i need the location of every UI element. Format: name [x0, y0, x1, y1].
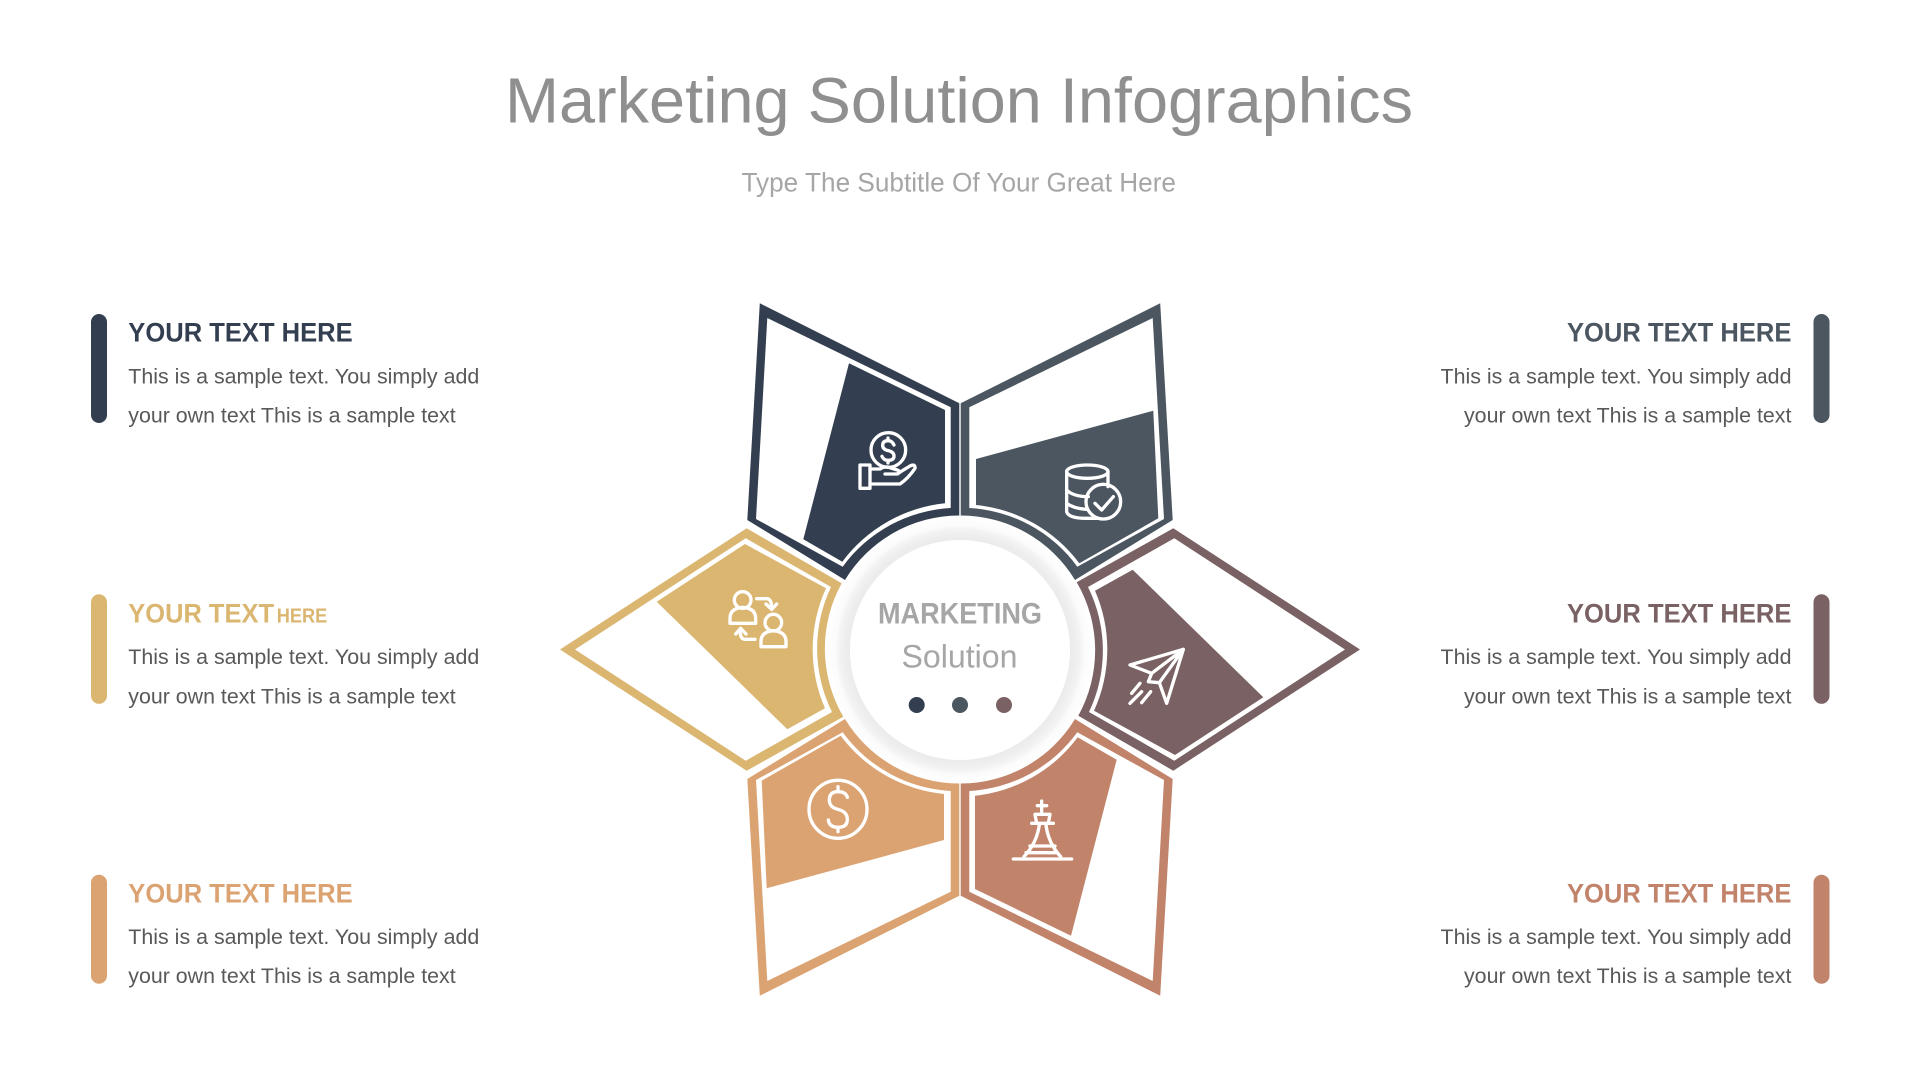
heading: YOUR TEXT HERE [1567, 318, 1791, 348]
center circle [827, 517, 1093, 783]
heading: HERE [277, 606, 327, 628]
body text: your own text This is a sample text [128, 404, 456, 428]
body text: This is a sample text. You simply add [1440, 925, 1792, 949]
petal: top right slate [961, 303, 1173, 580]
body text: your own text This is a sample text [128, 684, 456, 708]
icon: dollar circle [809, 780, 867, 838]
body text [128, 925, 479, 988]
icon: hand holding dollar coin [860, 433, 915, 488]
petal: bottom right terracotta [961, 719, 1173, 996]
accent bar [1814, 594, 1830, 704]
body text: your own text This is a sample text [1464, 404, 1791, 428]
body text [128, 645, 479, 708]
subtitle: Type The Subtitle Of Your Great Here [742, 168, 1176, 198]
body text: This is a sample text. You simply add [128, 364, 479, 388]
body text: your own text This is a sample text [1464, 964, 1791, 988]
panel: left text block 1 [91, 314, 479, 428]
panel: left text block 2 [91, 594, 479, 708]
body text [128, 364, 479, 428]
accent bar [1814, 314, 1830, 423]
body text: This is a sample text. You simply add [128, 925, 479, 949]
inner disc [850, 540, 1070, 760]
center subheading: Solution [902, 639, 1018, 675]
body text: This is a sample text. You simply add [1440, 364, 1792, 388]
three dots [909, 697, 1012, 713]
icon: user exchange [730, 592, 786, 647]
panel: right text block 3 [1440, 875, 1830, 988]
petal: right mauve [1077, 528, 1360, 771]
title: Marketing Solution Infographics [505, 65, 1413, 137]
ring [827, 517, 1093, 783]
body text [1440, 925, 1792, 988]
accent bar [91, 314, 107, 423]
accent bar [91, 594, 107, 704]
panel: right text block 2 [1440, 594, 1830, 708]
heading: YOUR TEXT HERE [1567, 599, 1791, 629]
heading: YOUR TEXT HERE [1567, 879, 1791, 909]
center heading: MARKETING [878, 597, 1042, 630]
accent bar [1814, 875, 1830, 984]
accent bar [91, 875, 107, 984]
body text: your own text This is a sample text [1464, 684, 1791, 708]
petal: bottom left orange [747, 719, 959, 996]
icon: paper plane [1130, 649, 1183, 703]
petal: left tan [560, 528, 843, 771]
body text: This is a sample text. You simply add [128, 645, 479, 669]
body text: This is a sample text. You simply add [1440, 645, 1792, 669]
icon: database with check [1067, 465, 1121, 519]
body text [1440, 645, 1792, 708]
panel: right text block 1 [1440, 314, 1830, 428]
heading: YOUR TEXT HERE [128, 879, 353, 909]
icon: chess king [1013, 801, 1072, 859]
heading: YOUR TEXT HERE [128, 318, 353, 348]
body text: your own text This is a sample text [128, 964, 456, 988]
petal: top left navy [747, 303, 959, 580]
panel: left text block 3 [91, 875, 479, 988]
body text [1440, 364, 1792, 428]
heading: YOUR TEXT [128, 599, 274, 629]
